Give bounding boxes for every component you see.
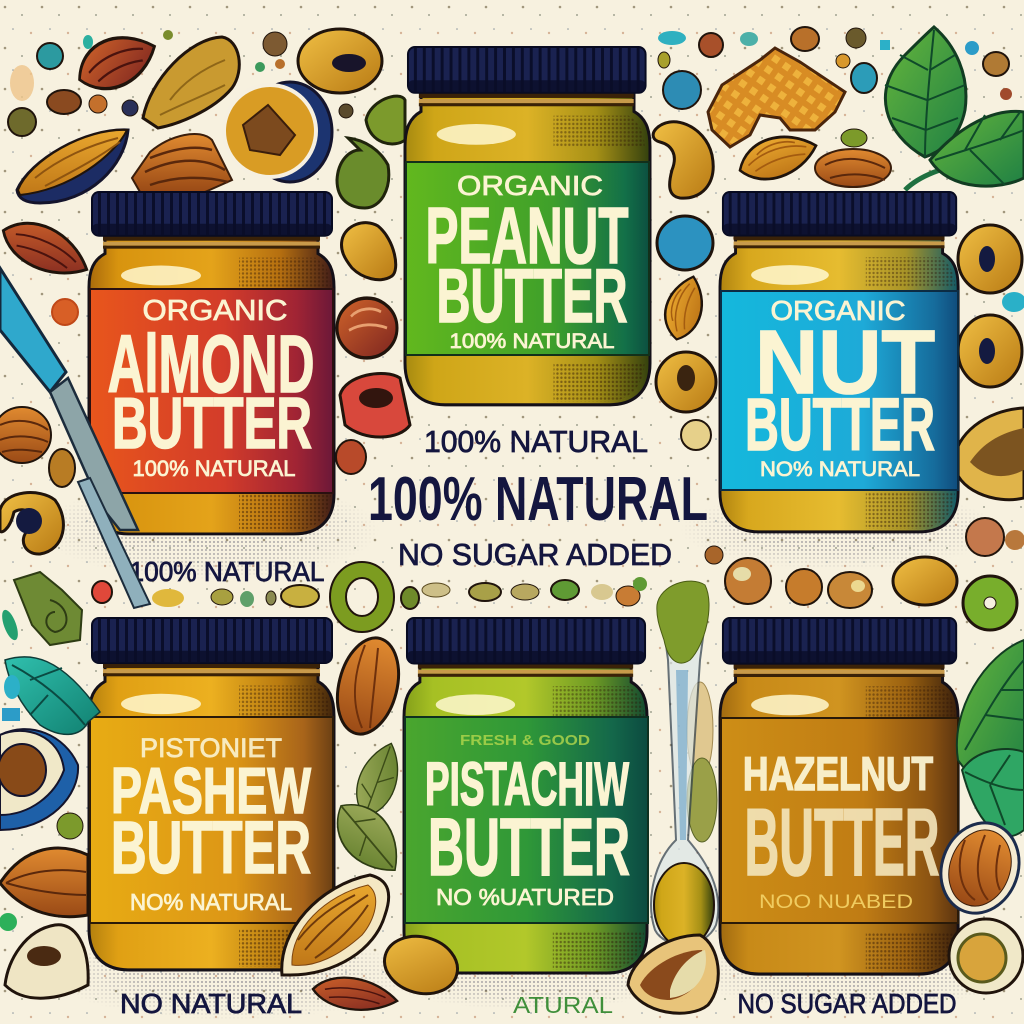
centre text block: [368, 424, 708, 572]
label: peanut: [406, 162, 649, 355]
label: pashew: BUTTER: [111, 806, 311, 889]
nuts: pistachio beneath spoon: [628, 935, 718, 1013]
label: pistachio: FRESH & GOOD: [460, 732, 590, 749]
nuts: between centre and right jars: [656, 216, 716, 450]
jar: pistachio butter: [404, 618, 648, 973]
jar: pashew butter: [89, 618, 334, 970]
label: peanut: PEANUT: [426, 191, 629, 280]
halftone shadow under lower centre jar: [418, 969, 631, 1007]
nuts and leaves: between lower jars: [282, 631, 464, 1015]
nuts and leaves: lower right: [929, 640, 1024, 993]
label: nut: [721, 291, 958, 490]
nuts: between left and centre jars: [336, 223, 410, 474]
label: hazelnut: NOO NUABED: [759, 892, 913, 913]
label: nut: ORGANIC: [770, 295, 906, 326]
middle nut strip: [0, 570, 647, 645]
label: nut: NO% NATURAL: [760, 458, 920, 481]
label: almond: AlMOND: [108, 319, 314, 410]
jar: organic peanut butter: [405, 47, 650, 405]
text: 100% natural large: 100% NATURAL: [368, 465, 708, 534]
label: almond: [90, 289, 333, 493]
label: almond: BUTTER: [112, 384, 312, 464]
halftone shadow under lower right jar: [718, 958, 974, 1007]
nuts: top right cluster: [653, 27, 1024, 198]
text: caption bottom right: NO SUGAR ADDED: [738, 988, 956, 1019]
label: nut: NUT: [755, 313, 935, 413]
nuts: right middle strip: [705, 546, 1017, 630]
nuts: top left cluster: [8, 23, 405, 208]
label: hazelnut: HAZELNUT: [743, 747, 933, 800]
label: pistachio: BUTTER: [428, 802, 630, 893]
label: pashew: PISTONIET: [140, 733, 282, 763]
text: caption left: 100% NATURAL: [130, 556, 324, 587]
jar: organic almond butter: [89, 192, 334, 534]
text: caption bottom centre: ATURAL: [513, 992, 613, 1018]
label: peanut: BUTTER: [436, 254, 628, 339]
label: pistachio: [405, 717, 648, 923]
icon: spoon: [651, 581, 718, 947]
text: caption bottom left: NO NATURAL: [120, 988, 302, 1019]
nuts: left column: [0, 211, 96, 554]
label: pashew: PASHEW: [111, 754, 311, 827]
icon: butter knife blade and handle: [0, 268, 138, 530]
nuts: lower left: [0, 657, 100, 998]
text: 100% natural small: 100% NATURAL: [424, 424, 648, 459]
label: pistachio: NO %UATURED: [436, 884, 614, 910]
label: peanut: ORGANIC: [457, 170, 603, 201]
label: pashew: [90, 717, 333, 923]
label: hazelnut: [721, 718, 958, 923]
jar: hazelnut butter: [720, 618, 958, 974]
label: almond: ORGANIC: [142, 295, 288, 327]
label: peanut: 100% NATURAL: [450, 330, 614, 353]
icon: butter knife lower handle over caption: [78, 478, 150, 608]
label: almond: 100% NATURAL: [132, 456, 296, 481]
nuts: right column: [954, 225, 1024, 556]
jar: organic nut butter: [720, 192, 958, 532]
nuts behind spoon: [687, 682, 717, 842]
halftone shadow under right jar: [690, 509, 979, 567]
label: pistachio: PISTACHIW: [425, 750, 629, 818]
text: no sugar added: NO SUGAR ADDED: [398, 537, 672, 572]
halftone shadow under lower left jar: [78, 950, 394, 1018]
label: pashew: NO% NATURAL: [130, 889, 292, 915]
halftone shadows beneath jars: [58, 502, 370, 575]
